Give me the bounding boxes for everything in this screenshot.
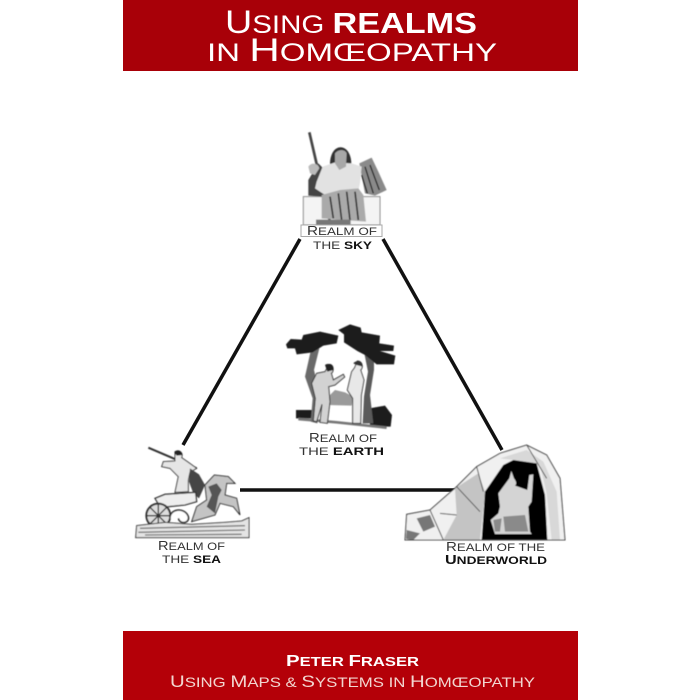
label: realm of the sea: REALM OF [158, 539, 225, 553]
illustration: Hades in cave, realm of the underworld [405, 445, 565, 540]
label: realm of the earth: THE EARTH [299, 446, 384, 458]
label: realm of the underworld [445, 540, 547, 567]
title: in Homœopathy: IN H OMŒOPATHY [207, 32, 497, 68]
label: realm of the underworld: REALM OF THE [446, 540, 545, 554]
label: realm of the sky: THE SKY [313, 240, 373, 252]
label: realm of the sea: THE SEA [162, 554, 221, 566]
illustration: Adam and Eve, realm of the earth [286, 324, 395, 428]
title: Using Realms: USING REALMS [225, 4, 477, 40]
panel: bottom author band [123, 631, 578, 700]
label: realm of the earth: REALM OF [309, 431, 377, 445]
label: realm of the earth [299, 431, 384, 458]
series title: USING MAPS & SYSTEMS IN HOMŒOPATHY [170, 672, 536, 691]
label: realm of the sky: REALM OF [307, 224, 377, 238]
label: realm of the sea [158, 539, 225, 566]
panel: top title band [123, 0, 578, 71]
illustration: Poseidon's chariot, realm of the sea [136, 448, 249, 538]
illustration: Zeus, realm of the sky [303, 132, 387, 225]
author name: PETER FRASER [286, 653, 420, 670]
label: realm of the underworld: UNDERWORLD [445, 552, 547, 567]
triangle connecting the realms [183, 239, 502, 490]
label: realm of the sky [301, 224, 382, 252]
